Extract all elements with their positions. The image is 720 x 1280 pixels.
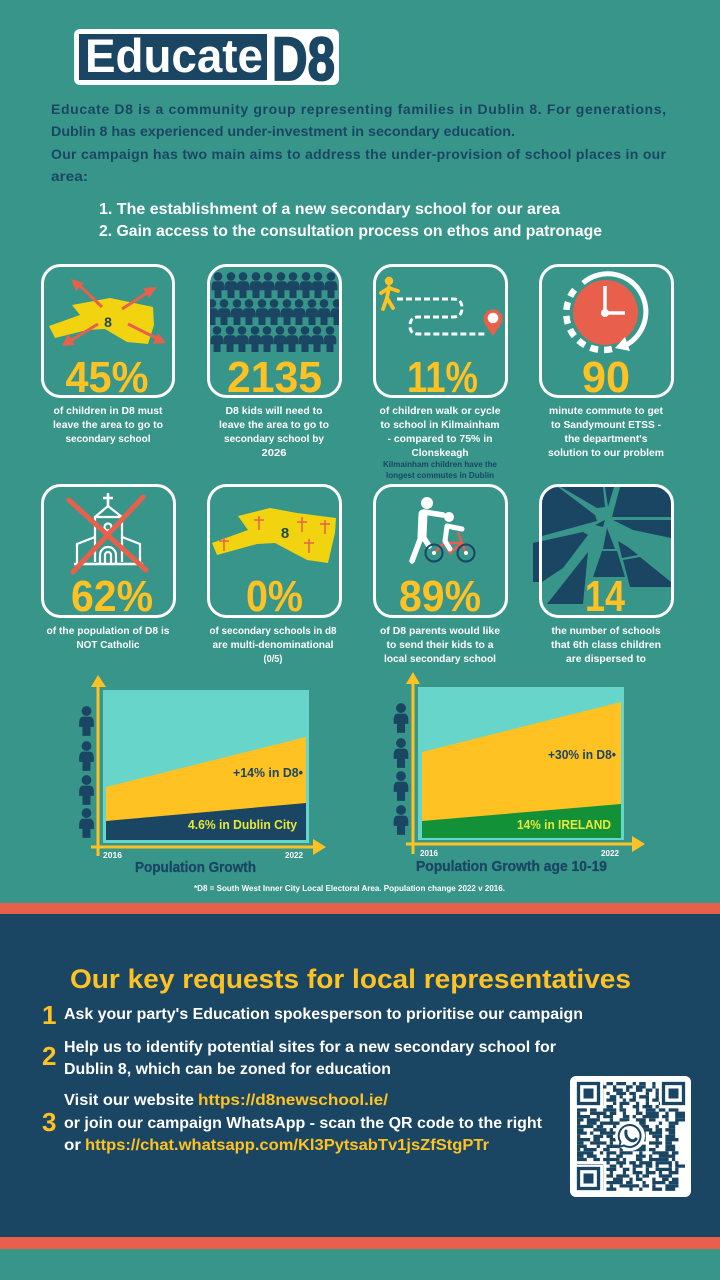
caption bbox=[219, 405, 329, 459]
icon: D8 map with outward arrows bbox=[49, 279, 166, 346]
request 1: Ask your party's Education spokesperson to prioritise our campaign bbox=[64, 1006, 583, 1023]
caption bbox=[380, 405, 501, 459]
chart: population growth age 10-19: 2016 bbox=[420, 848, 438, 858]
request 3: 3 bbox=[42, 1107, 56, 1137]
caption bbox=[380, 625, 500, 665]
request 2: Help us to identify potential sites for a new secondary school for bbox=[64, 1039, 556, 1056]
axes bbox=[91, 675, 326, 856]
request 3: https://d8newschool.ie/ bbox=[198, 1092, 389, 1109]
caption: D8 kids will need to bbox=[226, 405, 322, 417]
stat card: 89%: 89% bbox=[399, 572, 481, 621]
intro text: Dublin 8 has experienced under-investment in secondary education. bbox=[51, 123, 515, 139]
chart: population growth age 10-19: 14% in IRELAND bbox=[517, 817, 611, 832]
caption: of children walk or cycle bbox=[380, 405, 501, 417]
intro text: area: bbox=[51, 168, 88, 184]
caption: of children in D8 must bbox=[54, 405, 163, 417]
request 3: https://chat.whatsapp.com/Kl3PytsabTv1jsZfStgPTr bbox=[85, 1137, 489, 1154]
plot area bbox=[418, 687, 624, 840]
caption: to school in Kilmainham bbox=[380, 419, 500, 431]
aims list: 1. The establishment of a new secondary school for our area bbox=[99, 201, 560, 218]
request 2: 2 bbox=[42, 1041, 56, 1071]
stat card: 90: 90 bbox=[582, 353, 630, 402]
chart: population growth age 10-19 bbox=[394, 672, 645, 875]
caption: of the population of D8 is bbox=[46, 625, 170, 637]
caption: (0/5) bbox=[264, 653, 282, 665]
intro text: Educate D8 is a community group representing families in Dublin 8. For generations, bbox=[51, 101, 666, 117]
request 3: or bbox=[64, 1137, 81, 1154]
icon: crossed-out church bbox=[69, 493, 146, 572]
stat card: 0% bbox=[208, 486, 340, 665]
stat card: 45%: 45% bbox=[66, 353, 148, 402]
logo: Educate bbox=[85, 29, 263, 82]
icon: D8 map with crosses: 8 bbox=[281, 525, 289, 542]
note: longest commutes: longest commutes in Dublin bbox=[386, 471, 494, 480]
caption bbox=[210, 625, 337, 665]
note: longest commutes bbox=[383, 460, 498, 480]
caption: minute commute to get bbox=[549, 405, 663, 417]
caption: - compared to 75% in bbox=[388, 433, 492, 445]
caption: leave the area to go to bbox=[219, 419, 329, 431]
caption bbox=[53, 405, 163, 445]
caption: the department's bbox=[564, 433, 648, 445]
caption: to Sandymount ETSS - bbox=[551, 419, 661, 431]
intro text bbox=[51, 101, 667, 184]
icon: walker on dashed route to pin bbox=[381, 277, 502, 336]
caption: NOT Catholic bbox=[76, 639, 140, 651]
chart: population growth: 4.6% in Dublin City bbox=[188, 817, 298, 832]
panel: key requests bbox=[0, 903, 720, 1249]
caption bbox=[551, 625, 661, 665]
request 1: 1 bbox=[42, 1000, 56, 1030]
chart: population growth bbox=[79, 675, 326, 876]
stat card: 11% bbox=[374, 266, 506, 480]
caption: that 6th class children bbox=[551, 639, 661, 651]
logo bbox=[74, 25, 339, 93]
icon: shattered glass bbox=[533, 487, 671, 604]
caption: are dispersed to bbox=[566, 653, 646, 665]
stat card: 62% bbox=[42, 486, 174, 651]
stat card: 62%: 62% bbox=[71, 572, 153, 621]
request 1 bbox=[42, 1000, 583, 1030]
people icons bbox=[79, 706, 94, 838]
caption: of D8 parents would like bbox=[380, 625, 500, 637]
caption bbox=[548, 405, 664, 459]
caption: Clonskeagh bbox=[412, 447, 468, 459]
chart: population growth: Population Growth bbox=[135, 860, 256, 876]
caption: local secondary school bbox=[384, 653, 496, 665]
icon: D8 map with outward arrows: 8 bbox=[104, 314, 112, 330]
chart: population growth: 2016 bbox=[103, 850, 122, 860]
caption: are multi-denominational bbox=[212, 639, 334, 651]
aims list bbox=[99, 201, 602, 240]
intro text: Our campaign has two main aims to address the under-provision of school places in our bbox=[51, 146, 667, 162]
stat card: 2135 bbox=[206, 266, 343, 459]
QR code bbox=[570, 1076, 691, 1197]
stat card: 2135: 2135 bbox=[227, 353, 322, 402]
aims list: 2. Gain access to the consultation process on ethos and patronage bbox=[99, 223, 602, 240]
request 3: or join our campaign WhatsApp - scan the QR code to the right bbox=[64, 1115, 542, 1132]
people icons bbox=[394, 703, 408, 835]
request 3 bbox=[42, 1092, 542, 1154]
footnote: *D8 = South West Inner City Local Electoral Area. Population change 2022 v 2016. bbox=[194, 883, 505, 893]
request 3: Visit our website bbox=[64, 1092, 194, 1109]
chart: population growth age 10-19: 2022 bbox=[601, 848, 619, 858]
chart: population growth age 10-19: Population Growth age 10-19 bbox=[416, 859, 607, 875]
caption bbox=[46, 625, 170, 651]
request 2 bbox=[42, 1039, 556, 1078]
stat card: 90 bbox=[540, 266, 672, 459]
note: longest commutes: Kilmainham children have the bbox=[383, 460, 498, 469]
icon: rows of people bbox=[206, 272, 343, 352]
stat card: 45% bbox=[42, 266, 174, 445]
stat card: 0%: 0% bbox=[246, 572, 303, 621]
chart: population growth age 10-19: +30% in D8• bbox=[548, 748, 616, 762]
chart: population growth: +14% in D8• bbox=[233, 766, 303, 780]
caption: leave the area to go to bbox=[53, 419, 163, 431]
caption: of secondary schools in d8 bbox=[210, 625, 337, 637]
stat card: 89% bbox=[374, 486, 506, 665]
stat card: 14 bbox=[533, 486, 672, 665]
caption: solution to our problem bbox=[548, 447, 664, 459]
heading: Our key requests for local representatives bbox=[70, 964, 631, 994]
request 2: Dublin 8, which can be zoned for education bbox=[64, 1061, 391, 1078]
caption: the number of schools bbox=[552, 625, 661, 637]
icon: WhatsApp bbox=[615, 1121, 645, 1151]
plot area bbox=[103, 690, 309, 843]
stat card: 14: 14 bbox=[585, 572, 625, 621]
caption: secondary school by bbox=[224, 433, 324, 445]
icon: parent teaching child to ride bbox=[412, 497, 474, 562]
stat card: 11%: 11% bbox=[407, 353, 478, 402]
icon: clock bbox=[566, 274, 646, 351]
chart: population growth: 2022 bbox=[285, 850, 303, 860]
logo: D8 bbox=[272, 25, 335, 93]
axes bbox=[406, 672, 645, 854]
caption: 2026 bbox=[262, 447, 287, 459]
caption: secondary school bbox=[66, 433, 151, 445]
icon: D8 map with crosses bbox=[212, 508, 336, 563]
caption: to send their kids to a bbox=[386, 639, 494, 651]
